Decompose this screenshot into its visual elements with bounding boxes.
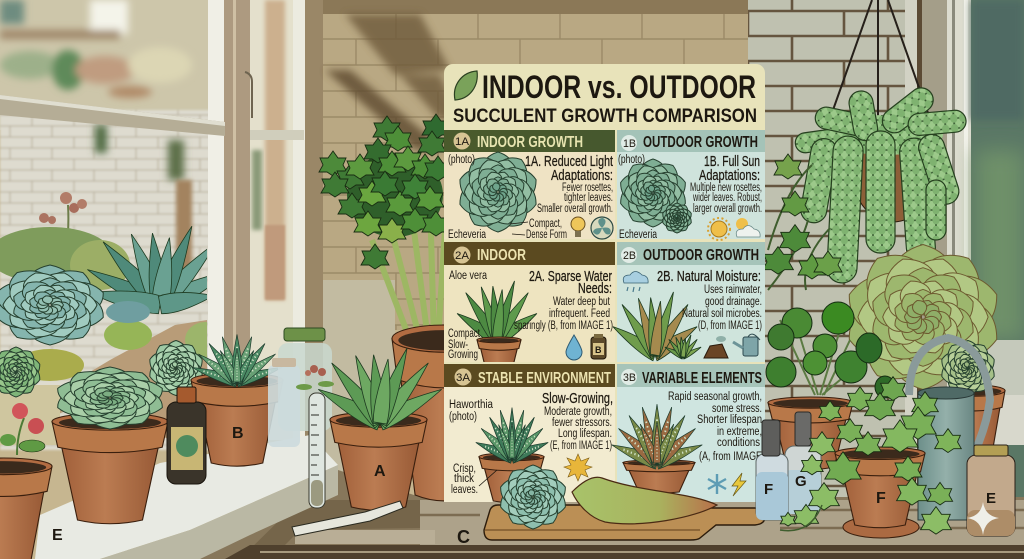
big pot C with leafy plant <box>319 114 497 501</box>
header 2B <box>617 242 765 265</box>
header 2A <box>444 242 615 265</box>
text 3B: (A, from IMAGE <box>699 451 762 463</box>
right window frame and outdoor view <box>917 0 1024 500</box>
callout: crisp thick leaves: leaves. <box>451 484 478 496</box>
header 1A <box>444 130 615 152</box>
panel: 2A indoor <box>444 242 615 374</box>
panel: 3B variable elements <box>610 364 765 502</box>
title block <box>453 69 757 127</box>
callout: compact dense form: Compact, <box>529 218 562 230</box>
text 1B: 1B. Full Sun <box>704 153 760 170</box>
text 1A: Adaptations: <box>551 167 613 184</box>
succulent cutting <box>495 462 571 532</box>
jar E <box>967 445 1015 536</box>
small green rosettes <box>0 346 40 398</box>
text 3B: conditions <box>717 437 760 449</box>
header 1A: 1A <box>455 136 470 148</box>
callout: compact dense form: Dense Form <box>526 229 567 241</box>
panel: 1B outdoor growth <box>615 130 765 241</box>
coco basket <box>853 128 933 222</box>
panel: 3A stable environment <box>444 364 615 503</box>
text 3A <box>542 390 613 452</box>
text 2A: sparingly (B, from IMAGE 1) <box>514 320 613 332</box>
label E on sill: E <box>52 527 63 544</box>
text 3B: Shorter lifespan <box>697 414 762 426</box>
photo and species caption: Echeveria <box>448 229 486 241</box>
photo and species caption: (photo) <box>448 154 475 166</box>
text 1B: Adaptations: <box>699 167 760 184</box>
leaf cluster <box>319 114 452 269</box>
pale brick wall right <box>748 0 918 510</box>
icon: snowflake <box>708 474 726 494</box>
label C: C <box>457 527 470 547</box>
photo and species caption: Echeveria <box>619 229 657 241</box>
chains <box>833 0 928 120</box>
icon: fan <box>591 217 613 239</box>
text 3A: fewer stressors. <box>552 417 612 429</box>
photo and species caption: (photo) <box>618 154 645 166</box>
header 3B: VARIABLE ELEMENTS <box>642 370 762 387</box>
header 3A: 3A <box>456 372 471 384</box>
icon: leaf <box>454 71 477 100</box>
tan brick wall <box>323 0 753 475</box>
header 3A: STABLE ENVIRONMENT <box>478 370 611 387</box>
aloe vera in pot <box>456 280 538 362</box>
text 1A <box>525 153 614 215</box>
bottle G: G <box>795 473 807 490</box>
trowel <box>292 501 403 536</box>
text 2B <box>657 268 762 332</box>
text 2B: (D, from IMAGE 1) <box>698 320 762 332</box>
fertilizer bottle <box>167 387 206 484</box>
label F: F <box>876 490 886 507</box>
text 1A: 1A. Reduced Light <box>525 153 614 170</box>
text 3A: (E, from IMAGE 1) <box>550 440 612 452</box>
text 3B: some stress. <box>712 403 762 415</box>
header 2B: 2B <box>623 250 636 262</box>
haworthia pot B <box>190 334 284 466</box>
species and callout captions <box>448 270 487 361</box>
pot C <box>392 325 497 501</box>
board <box>484 505 765 540</box>
text 3B <box>668 391 762 463</box>
photo and species caption <box>618 154 657 241</box>
text 2B: 2B. Natural Moisture: <box>657 268 761 285</box>
sparkle watermark <box>967 502 999 535</box>
photo and species caption <box>448 154 486 241</box>
echeveria main pot <box>48 364 172 524</box>
header 3B: 3B <box>623 372 636 384</box>
garden path <box>60 320 207 438</box>
rosettes photo 1B <box>615 155 694 235</box>
label B: B <box>232 425 244 442</box>
icon: fertilizer bottle B: B <box>595 345 602 355</box>
header 2A: INDOOR <box>477 247 526 264</box>
large blue rosette <box>0 264 104 346</box>
caption: haworthia: (photo) <box>449 411 477 423</box>
pink flower stalks <box>39 192 87 228</box>
callout: crisp thick leaves: thick <box>454 473 474 485</box>
glass jars behind <box>268 328 332 447</box>
text 2A: infrequent. Feed <box>549 308 610 320</box>
icon: water drop <box>566 335 582 360</box>
text 2A: 2A. Sparse Water <box>529 268 612 285</box>
pot E with flowering plant <box>0 403 52 559</box>
caption: haworthia: Haworthia <box>449 399 494 411</box>
haworthia in pot <box>474 408 550 503</box>
header 1B: OUTDOOR GROWTH <box>643 134 758 151</box>
text 1B: wider leaves. Robust, <box>692 192 762 204</box>
icon: rain cloud <box>623 272 648 292</box>
label E: E <box>986 490 996 507</box>
pilea plant <box>766 302 895 469</box>
icon: light bulb <box>571 217 585 237</box>
species and callout captions: Aloe vera <box>449 270 487 282</box>
infographic card <box>444 64 765 503</box>
right glass pane with exterior brick <box>248 0 306 440</box>
text 3A: Slow-Growing, <box>542 390 613 407</box>
ivy vine on wall <box>763 154 842 290</box>
window sill <box>35 435 338 559</box>
species and callout captions: Growing <box>448 349 478 361</box>
text 3A: Long lifespan. <box>558 428 612 440</box>
ivy foliage <box>780 377 961 534</box>
header 1B: 1B <box>623 138 636 150</box>
panel: 1A indoor growth <box>444 130 615 241</box>
text 1B <box>690 153 762 215</box>
sempervivum and pot at right <box>836 237 1010 457</box>
icon: sun behind cloud <box>736 218 760 237</box>
header 3B <box>617 364 765 387</box>
test tube with sprig <box>296 365 334 508</box>
green cluster behind <box>0 227 102 278</box>
header 1A: INDOOR GROWTH <box>477 134 583 151</box>
text 2B: Uses rainwater, <box>704 284 762 296</box>
callout: crisp thick leaves <box>451 463 497 496</box>
text 1B: larger overall growth. <box>693 203 762 215</box>
cutting board with rosette and leaf <box>484 462 765 540</box>
icon: watering can <box>733 334 760 356</box>
panel: 2B outdoor growth <box>611 242 765 362</box>
aloe pot A <box>315 345 445 510</box>
icon: soil with microbes <box>704 336 728 358</box>
icon: lightning bolt <box>732 473 746 496</box>
caption: haworthia <box>449 399 494 423</box>
text 2A <box>514 268 613 332</box>
header 3A <box>444 364 615 387</box>
outdoor garden view through left window <box>0 0 215 450</box>
text 3B: in extreme, <box>717 426 762 438</box>
card background <box>444 64 765 502</box>
text 1A: tighter leaves. <box>564 192 613 204</box>
ivy pot F <box>780 377 961 538</box>
wooden table <box>200 470 1024 559</box>
main title: INDOOR vs. OUTDOOR <box>482 69 756 105</box>
icon: sun <box>564 454 592 481</box>
species and callout captions: Slow- <box>448 339 468 351</box>
leaf cutting <box>572 477 717 524</box>
spray bottles F and G <box>756 412 821 520</box>
text 3B: Rapid seasonal growth, <box>668 391 762 403</box>
label A: A <box>374 463 386 480</box>
text 2B: good drainage. <box>705 296 762 308</box>
icon: fertilizer bottle B <box>591 334 606 359</box>
header 2B: OUTDOOR GROWTH <box>643 247 759 264</box>
header 2A: 2A <box>455 250 470 262</box>
saucer <box>843 516 919 538</box>
moss mounds <box>104 320 152 350</box>
callout: compact dense form <box>510 218 567 241</box>
species and callout captions: Compact <box>448 328 481 340</box>
rosette photo 1A <box>453 148 543 236</box>
pearl strands <box>794 83 967 284</box>
text 2A: Needs: <box>578 280 612 297</box>
aloe with reddish tips <box>611 289 702 361</box>
hanging basket with string of pearls <box>794 0 967 284</box>
reddish haworthia in pot <box>610 404 704 493</box>
icon: sun <box>708 218 730 240</box>
text 3A: Moderate growth, <box>544 406 612 418</box>
header 1B <box>617 130 765 152</box>
watering can <box>909 338 990 520</box>
text 2A: Water deep but <box>553 296 611 308</box>
text 1B: Multiple new rosettes, <box>690 182 762 194</box>
text 1A: Fewer rosettes, <box>562 182 613 194</box>
bottle F: F <box>764 481 773 498</box>
garden succulents outside window <box>0 192 207 445</box>
stems <box>372 200 445 340</box>
subtitle: SUCCULENT GROWTH COMPARISON <box>453 105 757 127</box>
text 2B: Natural soil microbes. <box>682 308 762 320</box>
callout: crisp thick leaves: Crisp, <box>453 463 476 475</box>
teal agave <box>87 226 207 296</box>
window frame <box>0 0 323 440</box>
text 1A: Smaller overall growth. <box>537 203 613 215</box>
